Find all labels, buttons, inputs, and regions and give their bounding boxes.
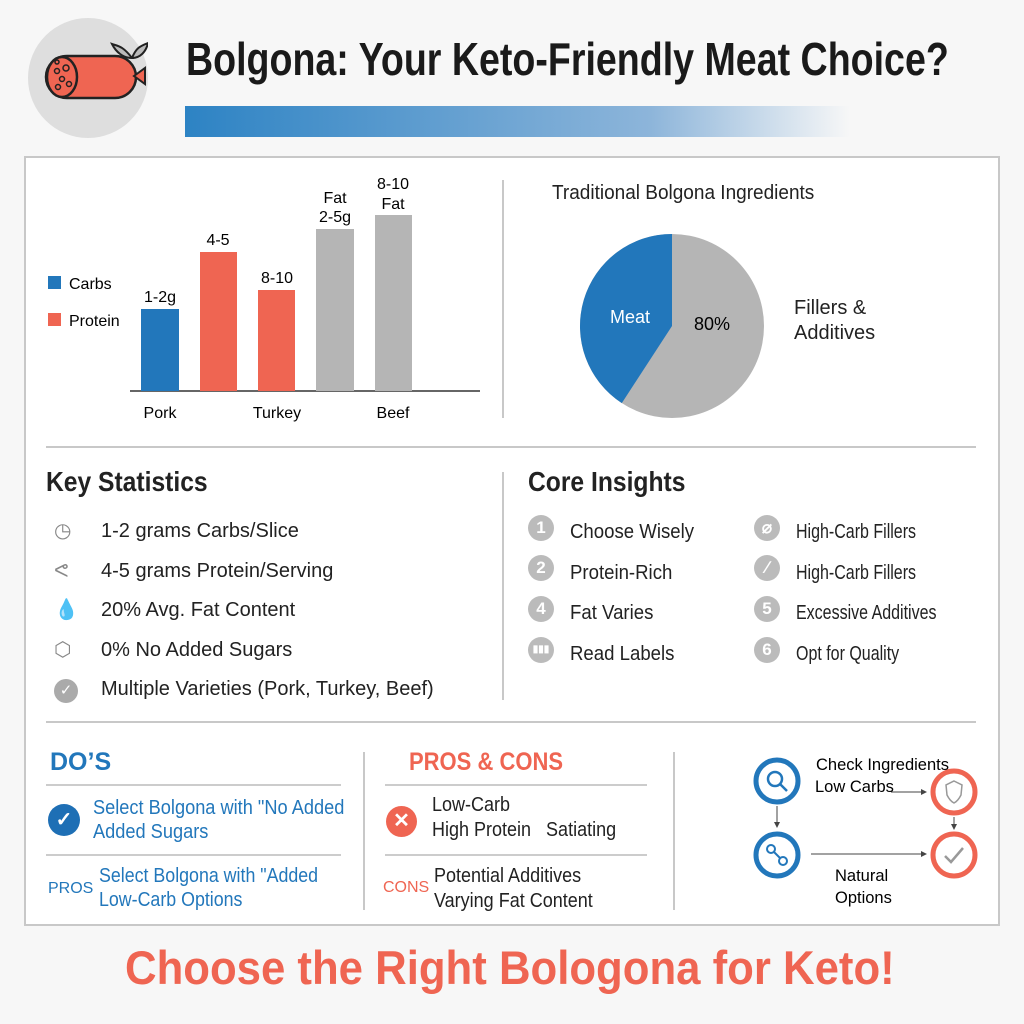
core insights: Protein-Rich <box>570 562 672 584</box>
core insights: High-Carb Fillers <box>796 521 916 543</box>
panel: do's: Added Sugars <box>93 821 208 843</box>
title underline bar <box>185 106 850 137</box>
panel: do's: DO’S <box>50 748 111 776</box>
core insights: Core Insights <box>528 466 685 497</box>
core insights: 2 <box>536 558 546 577</box>
bar chart: Beef <box>377 405 410 422</box>
panel: do's: PROS <box>48 880 93 897</box>
panel: do's: ✓ <box>56 809 72 831</box>
pie label: Fillers & <box>794 297 866 319</box>
panel: do's: Select Bolgona with "No Added <box>93 797 344 819</box>
stat items: 💧 <box>54 599 79 621</box>
core insights: 1 <box>536 518 546 537</box>
main panel frame <box>24 156 1000 926</box>
stat items: ⬡ <box>54 638 71 660</box>
bar chart: Turkey <box>253 405 301 422</box>
core insights: Opt for Quality <box>796 643 899 665</box>
flow diagram <box>754 756 978 907</box>
bar chart: 8-10 <box>261 270 293 287</box>
flow diagram: Low Carbs <box>815 778 894 796</box>
core insights: ⌀ <box>762 518 772 537</box>
flow diagram: Check Ingredients <box>816 756 949 774</box>
key statistics: 0% No Added Sugars <box>101 638 292 660</box>
icon: bologna sausage <box>28 18 148 138</box>
panel: do's: Select Bolgona with "Added <box>99 865 318 887</box>
panel: pros & cons <box>383 748 647 912</box>
core insights: Read Labels <box>570 643 674 665</box>
bar chart: Fat <box>381 196 405 213</box>
key statistics: 4-5 grams Protein/Serving <box>101 560 333 582</box>
panel: pros & cons: High Protein Satiating <box>432 819 616 841</box>
stat items <box>54 520 79 703</box>
flow diagram: Options <box>835 889 892 907</box>
key statistics: 1-2 grams Carbs/Slice <box>101 520 299 542</box>
bottom call to action: Choose the Right Bologona for Keto! <box>125 941 895 994</box>
bar chart: Fat <box>323 190 347 207</box>
core insights: Choose Wisely <box>570 521 694 543</box>
panel: do's: Low-Carb Options <box>99 889 242 911</box>
panel: pros & cons: CONS <box>383 879 429 896</box>
bar chart: 8-10 <box>377 176 409 193</box>
stat items: ᕙ <box>54 560 69 582</box>
core insights: Excessive Additives <box>796 602 937 624</box>
core insights: ▮▮▮ <box>533 644 549 655</box>
key statistics: Multiple Varieties (Pork, Turkey, Beef) <box>101 678 434 700</box>
core insights: 4 <box>536 599 546 618</box>
pie chart: Meat <box>610 307 650 327</box>
core insights: ∕ <box>766 558 768 577</box>
panel: pros & cons: ✕ <box>393 810 410 832</box>
panel: pros & cons: Varying Fat Content <box>434 890 593 912</box>
key statistics: Key Statistics <box>46 466 208 497</box>
core insights: 6 <box>762 640 772 659</box>
panel: pros & cons: PROS & CONS <box>409 748 563 776</box>
panel: pros & cons: Low-Carb <box>432 794 510 816</box>
bar chart <box>48 176 480 422</box>
core insights: High-Carb Fillers <box>796 562 916 584</box>
stat items: ◷ <box>54 520 71 542</box>
core insights <box>528 466 937 665</box>
panel: do's <box>46 748 344 911</box>
pie chart heading: Traditional Bolgona Ingredients <box>552 182 814 204</box>
bar chart: Protein <box>69 313 120 330</box>
bar chart: Carbs <box>69 276 112 293</box>
key statistics <box>46 466 434 703</box>
bar chart: 4-5 <box>206 232 230 249</box>
core insights: Fat Varies <box>570 602 653 624</box>
pie label: Additives <box>794 322 875 344</box>
flow diagram: Natural <box>835 867 888 885</box>
panel: pros & cons: Potential Additives <box>434 865 581 887</box>
pie label <box>794 297 875 344</box>
bar chart: 1-2g <box>144 289 176 306</box>
title: Bolgona: Your Keto-Friendly Meat Choice? <box>186 33 949 85</box>
stat items: ✓ <box>60 682 72 699</box>
bar chart: Pork <box>144 405 177 422</box>
pie chart: 80% <box>694 314 730 334</box>
pie chart <box>580 234 764 418</box>
bar chart: 2-5g <box>319 209 351 226</box>
core insights: 5 <box>762 599 772 618</box>
key statistics: 20% Avg. Fat Content <box>101 599 295 621</box>
